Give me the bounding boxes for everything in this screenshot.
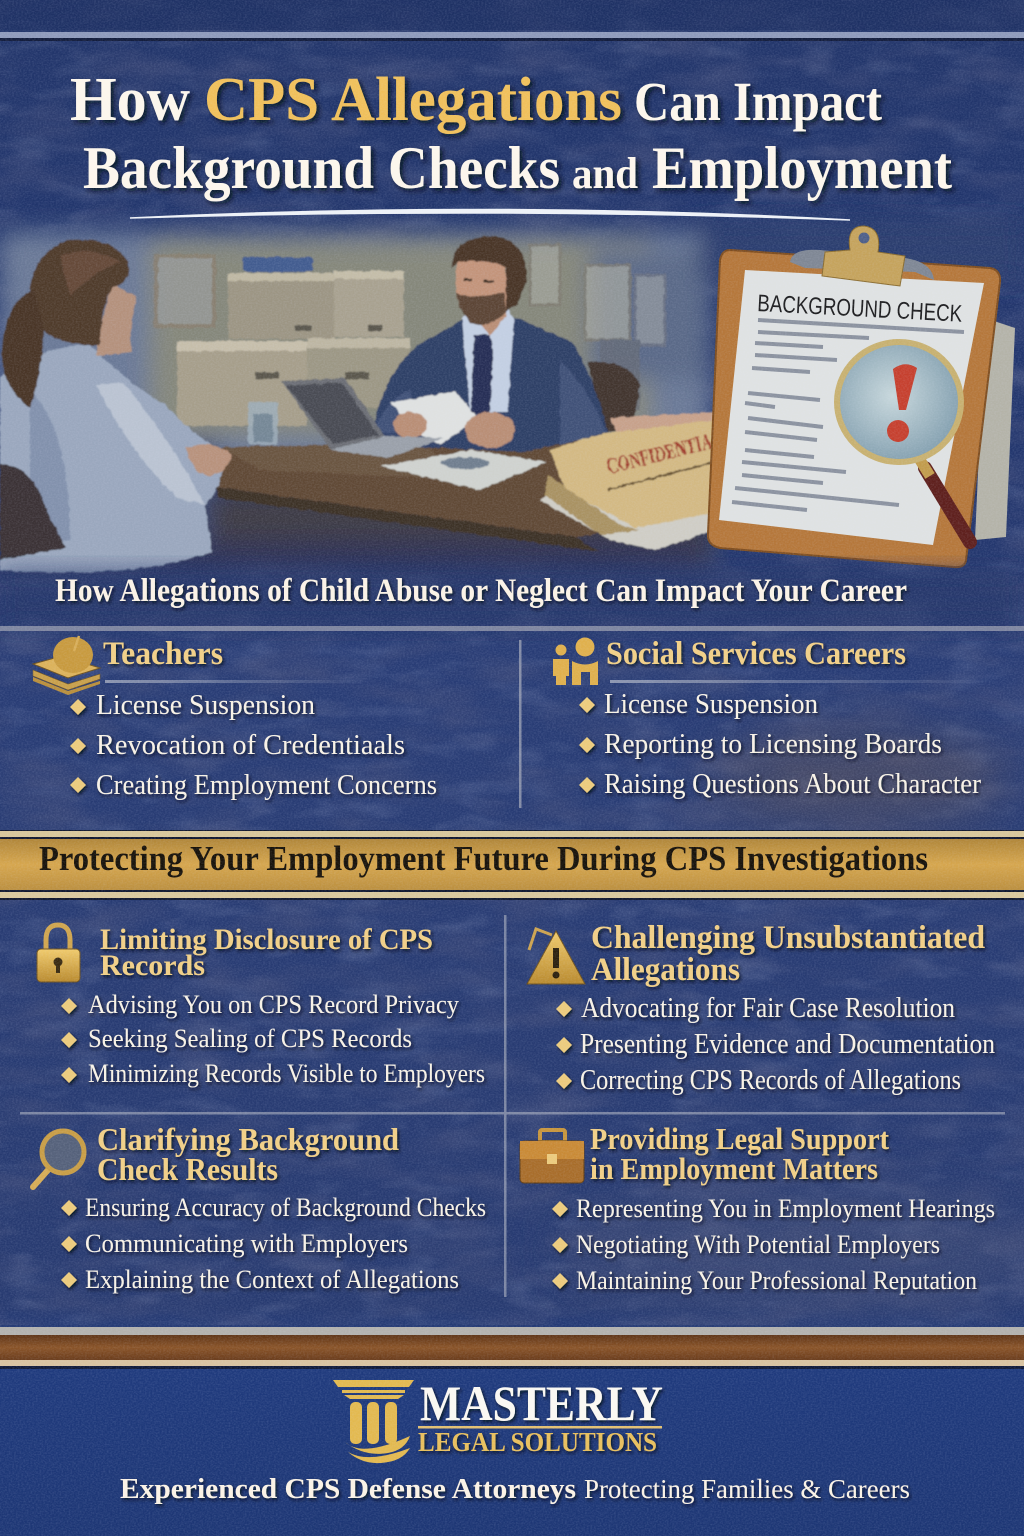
heading: limiting disclosure: Limiting Disclosure of CPS	[100, 923, 433, 956]
heading: providing legal support: Providing Legal Support	[590, 1121, 890, 1156]
panel: challenging unsubstantiated allegations	[527, 920, 995, 1096]
title: CPS Allegations	[204, 66, 622, 134]
icon: magnifier	[33, 1131, 84, 1187]
top rule	[0, 32, 1024, 41]
list: clarifying: Ensuring Accuracy of Background Checks	[85, 1193, 486, 1222]
icon: briefcase	[520, 1130, 584, 1183]
title: Employment	[652, 135, 952, 201]
heading: challenging: Challenging Unsubstantiated	[591, 920, 985, 956]
list: challenging: Advocating for Fair Case Resolution	[581, 993, 955, 1024]
list: legal support: Representing You in Employment Hearings	[576, 1194, 995, 1223]
heading: challenging	[591, 920, 985, 988]
banner heading: Protecting Your Employment Future During CPS Investigations	[39, 839, 928, 878]
list: challenging	[556, 993, 995, 1096]
icon: apple and books	[33, 636, 100, 695]
list: teachers: Creating Employment Concerns	[96, 770, 437, 801]
panel: social services careers	[553, 636, 1000, 800]
title underline swoosh	[130, 209, 850, 220]
list: legal support: Negotiating With Potential Employers	[576, 1230, 940, 1259]
heading: clarifying: Check Results	[97, 1151, 278, 1187]
list: teachers: Revocation of Credentiaals	[96, 730, 405, 761]
man in suit	[372, 236, 608, 452]
tagline	[120, 1473, 910, 1505]
title: Can Impact	[634, 71, 883, 132]
laptop	[281, 378, 444, 458]
logo: masterly legal solutions	[333, 1375, 663, 1463]
list: limiting disclosure: Advising You on CPS Record Privacy	[88, 990, 459, 1019]
confidential folder	[540, 412, 716, 550]
hero illustration	[0, 220, 1024, 573]
list: limiting disclosure: Minimizing Records Visible to Employers	[88, 1059, 485, 1088]
sub-wordmark: LEGAL SOLUTIONS	[418, 1427, 657, 1457]
background check label: BACKGROUND CHECK	[757, 290, 963, 328]
column divider	[519, 640, 522, 808]
heading: teachers: Teachers	[103, 636, 223, 672]
heading: clarifying: Clarifying Background	[97, 1121, 399, 1157]
office wall backdrop	[0, 220, 1024, 570]
list: legal support	[552, 1194, 995, 1295]
heading: providing legal support: in Employment Matters	[590, 1151, 878, 1186]
panel: teachers	[33, 636, 437, 801]
heading: challenging: Allegations	[591, 952, 740, 988]
title: How	[70, 66, 190, 134]
panel: limiting disclosure	[37, 923, 485, 1088]
list: social services: Reporting to Licensing Boards	[604, 729, 942, 760]
icon: warning triangle	[527, 929, 585, 984]
desk	[216, 440, 700, 552]
paper sheet	[719, 270, 984, 545]
wordmark: MASTERLY	[420, 1375, 663, 1431]
list: limiting disclosure: Seeking Sealing of CPS Records	[88, 1024, 412, 1053]
title: and	[572, 149, 638, 198]
heading: social services careers: Social Services Careers	[606, 636, 906, 672]
subtitle: How Allegations of Child Abuse or Neglect Can Impact Your Career	[55, 573, 907, 609]
list: challenging: Presenting Evidence and Documentation	[580, 1029, 995, 1060]
section rule	[0, 626, 1024, 631]
list: limiting disclosure	[61, 990, 485, 1088]
list: teachers	[70, 690, 437, 801]
list: social services	[579, 689, 982, 800]
wall frames	[156, 245, 665, 410]
list: clarifying: Explaining the Context of Allegations	[85, 1265, 459, 1294]
exclamation mark	[893, 364, 917, 410]
heading: clarifying	[97, 1121, 399, 1187]
panel grid dividers	[20, 915, 1005, 1297]
list: legal support: Maintaining Your Professional Reputation	[576, 1266, 977, 1295]
illustration lower fade	[0, 572, 1024, 626]
list: social services: Raising Questions About Character	[604, 769, 982, 800]
icon: padlock	[37, 925, 80, 982]
panel: providing legal support	[520, 1121, 995, 1295]
panel: clarifying background check results	[33, 1121, 486, 1294]
heading: limiting disclosure	[100, 923, 433, 982]
chair behind man	[588, 362, 640, 432]
list: teachers: License Suspension	[96, 690, 315, 721]
title	[70, 66, 952, 201]
paper text lines	[732, 320, 964, 510]
icon: pillar logo	[333, 1380, 414, 1463]
filing boxes	[177, 257, 410, 426]
gold clip	[790, 250, 934, 280]
banner: protecting your employment future	[0, 830, 1024, 900]
tagline: Experienced CPS Defense Attorneys	[120, 1473, 576, 1505]
paper stack	[975, 318, 1015, 540]
desk papers	[380, 450, 547, 490]
icon: people	[553, 638, 598, 685]
list: challenging: Correcting CPS Records of Allegations	[580, 1065, 961, 1096]
clipboard	[708, 226, 1000, 567]
list: clarifying	[61, 1193, 486, 1294]
title: Background Checks	[83, 135, 560, 201]
list: clarifying: Communicating with Employers	[85, 1229, 408, 1258]
confidential folder: CONFIDENTIA	[604, 428, 715, 479]
magnifying glass	[925, 468, 970, 542]
list: social services: License Suspension	[604, 689, 818, 720]
water glass	[248, 402, 278, 445]
heading: limiting disclosure: Records	[100, 949, 205, 982]
heading: providing legal support	[590, 1121, 890, 1186]
footer wood bar	[0, 1327, 1024, 1369]
tagline: Protecting Families & Careers	[584, 1474, 910, 1504]
woman client	[0, 239, 232, 573]
